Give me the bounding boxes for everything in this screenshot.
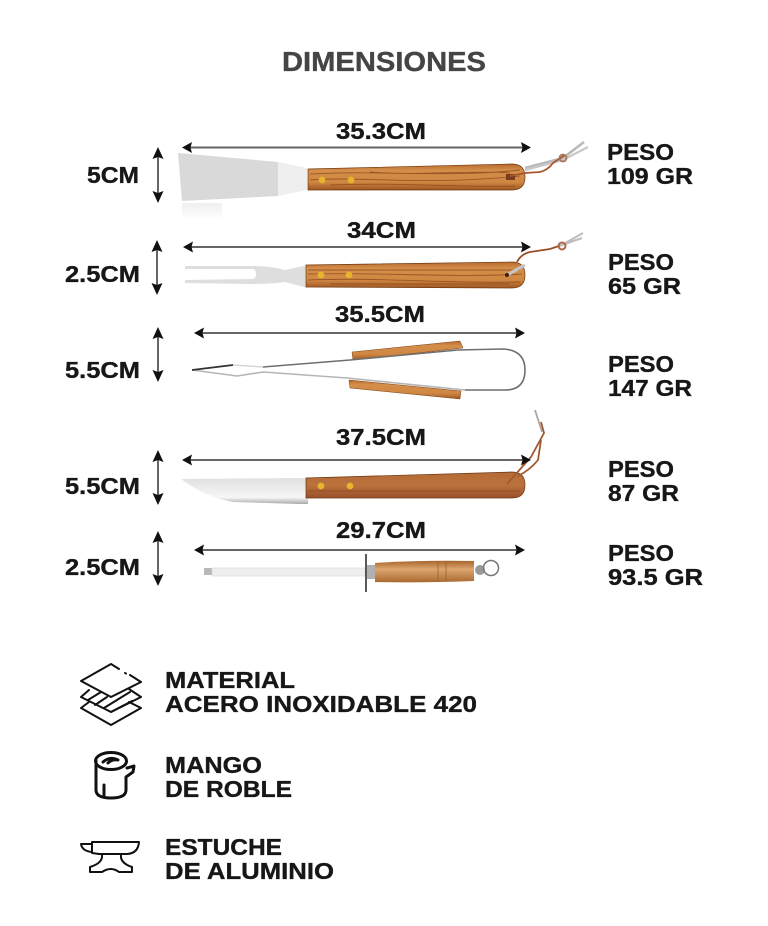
width label: 29.7CM <box>336 517 426 543</box>
row: knife <box>65 410 679 506</box>
material text: MATERIAL <box>165 667 295 693</box>
row: spatula <box>87 118 693 220</box>
width arrow 29.7CM <box>194 544 525 556</box>
icon: layers <box>81 664 141 725</box>
width label: 35.3CM <box>336 118 426 144</box>
weight label: PESO <box>608 249 674 275</box>
case text: DE ALUMINIO <box>165 858 334 884</box>
weight label: PESO <box>607 139 674 165</box>
width arrow 37.5CM <box>182 454 531 466</box>
knife image <box>181 410 544 504</box>
handle text: MANGO <box>165 752 262 778</box>
height arrow <box>152 450 164 505</box>
row: sharpener <box>65 517 703 592</box>
height label: 2.5CM <box>65 261 140 287</box>
fork image <box>185 233 583 288</box>
height arrow <box>152 240 162 295</box>
title: DIMENSIONES <box>282 46 486 77</box>
weight label: PESO <box>608 540 674 566</box>
row: tongs <box>65 301 692 401</box>
height label: 5.5CM <box>65 473 140 499</box>
height label: 5CM <box>87 162 139 188</box>
sharpener image <box>204 554 498 592</box>
weight label: PESO <box>608 351 674 377</box>
handle text <box>165 752 292 802</box>
case text <box>165 834 334 884</box>
height arrow <box>152 327 164 382</box>
weight value: 87 GR <box>608 480 679 506</box>
material text: ACERO INOXIDABLE 420 <box>165 691 477 717</box>
height label: 2.5CM <box>65 554 140 580</box>
height label: 5.5CM <box>65 357 140 383</box>
icon: wooden log mug <box>96 752 134 798</box>
width label: 34CM <box>347 217 416 243</box>
width arrow 34CM <box>183 242 531 252</box>
weight label: PESO <box>608 456 674 482</box>
tongs image <box>192 341 525 399</box>
width arrow 35.3CM <box>182 142 531 153</box>
weight value: 147 GR <box>608 375 692 401</box>
height arrow <box>152 147 164 203</box>
width arrow 35.5CM <box>194 328 525 338</box>
handle text: DE ROBLE <box>165 776 292 802</box>
row: fork <box>65 217 681 299</box>
material text <box>165 667 477 717</box>
spatula image <box>178 142 588 220</box>
weight value: 65 GR <box>608 273 681 299</box>
case text: ESTUCHE <box>165 834 282 860</box>
height arrow <box>152 531 164 586</box>
weight value: 109 GR <box>607 163 693 189</box>
width label: 35.5CM <box>335 301 425 327</box>
width label: 37.5CM <box>336 424 426 450</box>
icon: anvil <box>81 842 139 872</box>
weight value: 93.5 GR <box>608 564 703 590</box>
